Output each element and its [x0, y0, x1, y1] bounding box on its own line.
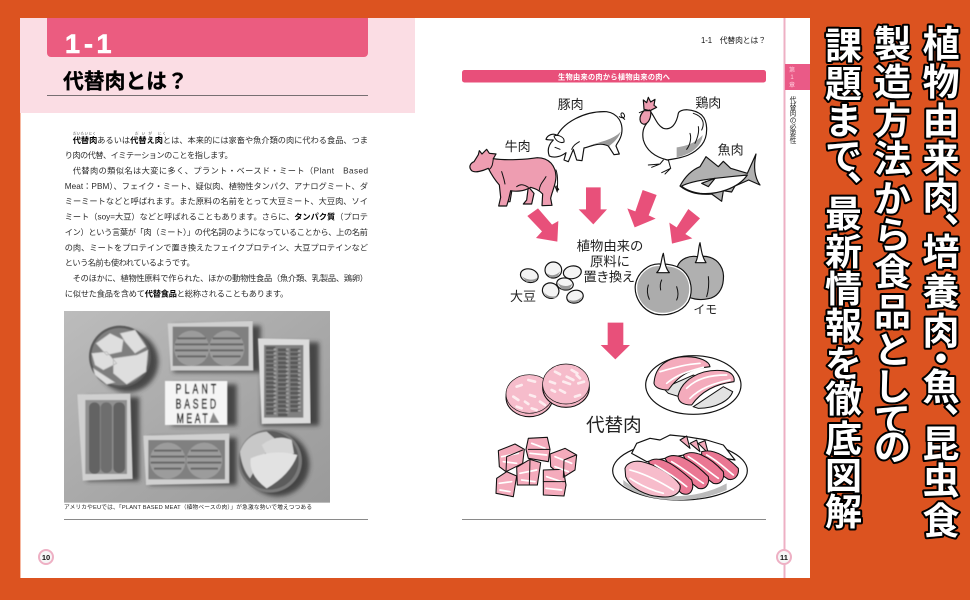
tray of patties bottom [143, 433, 229, 485]
chapter tab: 第 [789, 66, 795, 74]
lower diagram [496, 243, 747, 500]
running header: 1-1 代替肉とは？ [701, 35, 766, 45]
ruby [73, 130, 166, 136]
section number tab: 1-1 [65, 29, 112, 59]
photo: plant based meat packages [64, 311, 330, 503]
diagram: animal meat to plant based meat [470, 95, 760, 284]
light box sign: PLANT [176, 382, 216, 397]
body text: ミーミートなどと呼ばれます。また原料の名前をとって大豆ミート、大豆肉、ソイ [65, 196, 368, 206]
light box sign: MEAT [177, 411, 208, 427]
fish with label [680, 142, 760, 201]
alternative meat label: 代替肉 [586, 415, 642, 436]
tray of patties top [168, 321, 253, 371]
arrow from rooster [627, 190, 657, 227]
soybeans with label: 大豆 [510, 289, 536, 304]
heading: 代替肉とは？ [63, 70, 188, 94]
meat cubes [496, 437, 577, 497]
patties [506, 364, 589, 417]
pig with label [546, 97, 625, 162]
light box sign [165, 381, 227, 427]
body text [65, 130, 368, 298]
right banner headline, vertical text column 3: 課題まで、最新情報を徹底図解 [825, 26, 884, 533]
steak plate [613, 435, 747, 500]
sushi plate [646, 356, 741, 414]
pig with label: 豚肉 [558, 97, 584, 112]
book spread page [20, 18, 810, 578]
footer rule right [462, 519, 766, 520]
body text: ミート（soy=大豆）などと呼ばれることもあります。さらに、タンパク質（プロテ [65, 212, 368, 222]
page number 10 [39, 550, 53, 564]
chapter side rule [784, 18, 786, 578]
cow with label: 牛肉 [505, 139, 531, 154]
ruby: にく [158, 130, 166, 136]
body text: 代替肉あるいは代替え肉とは、本来的には家畜や魚介類の肉に代わる食品、つま [73, 135, 368, 145]
rooster with label [639, 95, 721, 174]
arrow from pig [579, 187, 607, 224]
chapter tab: 1 [790, 75, 794, 81]
fish with label: 魚肉 [718, 142, 744, 157]
section number tab [47, 18, 368, 59]
bowl of breaded fillets [238, 429, 302, 493]
replace label [577, 238, 643, 284]
ruby: だいが [135, 130, 152, 136]
ruby: だいたいにく [73, 130, 96, 136]
soybeans with label [510, 262, 585, 305]
replace label: 置き換え [583, 269, 635, 284]
body text: イン）という言葉が「肉（ミート）」の代名詞のようになっていることから、上の名前 [65, 227, 368, 237]
body text: Meat：PBM）、フェイク・ミート、疑似肉、植物性タンパク、アナログミート、ダ [65, 181, 368, 191]
arrow from fish [669, 209, 700, 244]
right banner headline, vertical text column 2: 製造方法から食品としての [874, 24, 911, 468]
photo shadows [87, 326, 319, 496]
pumpkins with label [635, 243, 724, 316]
light box sign: BASED [176, 396, 216, 412]
diagram title banner: 生物由来の肉から植物由来の肉へ [558, 72, 670, 82]
replace label: 植物由来の [577, 238, 643, 254]
replace label: 原料に [590, 254, 630, 269]
tray of ground meat [258, 338, 311, 424]
arrow to alternative meat [601, 323, 630, 359]
pumpkins with label: イモ [693, 302, 717, 316]
body text: り肉の代替、イミテーションのことを指します。 [65, 150, 233, 160]
arrow from cow [527, 208, 558, 242]
body text: に似せた食品を含めて代替食品と総称されることもあります。 [65, 288, 288, 298]
body text: という名前も使われているようです。 [65, 258, 195, 268]
cow with label [470, 139, 559, 206]
body text: の肉、ミートをプロテインで置き換えたフェイクプロテイン、大豆プロテインなど [65, 242, 368, 252]
chapter tab [785, 64, 810, 90]
bowl of nuggets [89, 326, 151, 388]
body text: 代替肉の類似名は大変に多く、プラント・ベースド・ミート（Plant Based [73, 166, 368, 176]
footer rule left [64, 519, 368, 520]
arrows from animals [527, 187, 700, 244]
panel: chapter heading band [20, 18, 415, 113]
diagram title banner [462, 70, 766, 82]
page number 10: 10 [42, 553, 50, 562]
body text: そのほかに、植物性原料で作られた、ほかの動物性食品（魚介類、乳製品、鶏卵） [73, 273, 368, 283]
photo caption: アメリカやEUでは、「PLANT BASED MEAT（植物ベースの肉）」が急激な勢いで増えつつある [64, 503, 312, 511]
chapter name vertical: 代替肉の必要性 [788, 95, 796, 145]
rooster with label: 鶏肉 [695, 95, 721, 110]
tray of sausages [77, 394, 133, 481]
chapter tab: 章 [789, 81, 795, 89]
page number 11: 11 [780, 553, 788, 562]
page number 11 [777, 550, 791, 564]
